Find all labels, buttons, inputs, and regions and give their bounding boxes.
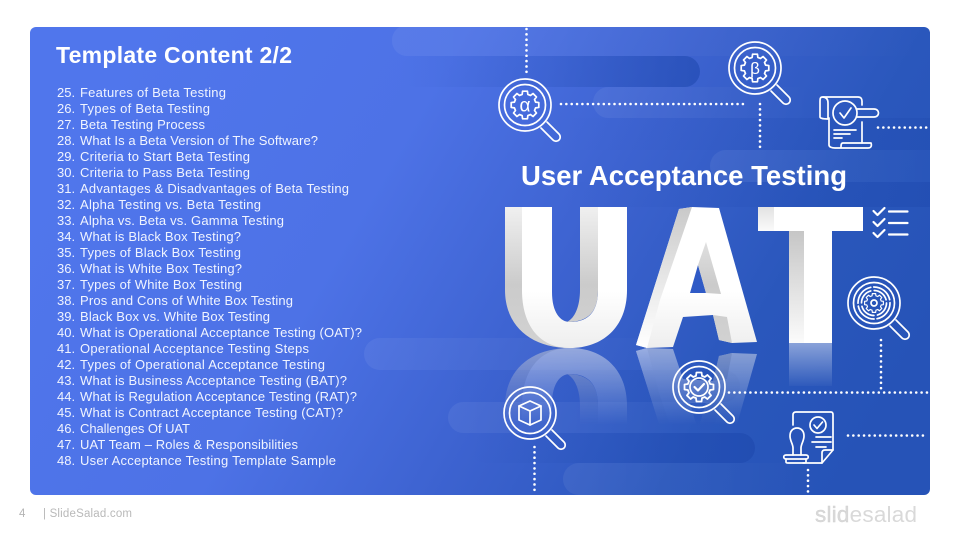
text block: table of contents list: 47.: [57, 437, 75, 452]
text block: table of contents list: 37.: [57, 277, 75, 292]
text block: table of contents list: 30.: [57, 165, 75, 180]
icon: alpha magnifier: [499, 79, 560, 141]
text block: table of contents list: What is Black Box Testing?: [80, 229, 241, 244]
3D letter U: [505, 207, 627, 348]
text block: table of contents list: 43.: [57, 373, 75, 388]
text block: table of contents list: 28.: [57, 133, 75, 148]
text block: table of contents list: What is Operational Acceptance Testing (OAT)?: [80, 325, 362, 340]
3D letter T: [758, 207, 863, 343]
text block: table of contents list: What is Contract Acceptance Testing (CAT)?: [80, 405, 343, 420]
text block: table of contents list: Types of Beta Testing: [80, 101, 210, 116]
icon: beta magnifier: [729, 42, 790, 104]
text block: table of contents list: UAT Team – Roles & Responsibilities: [80, 437, 298, 452]
text block: table of contents list: 46.: [57, 421, 75, 436]
text block: table of contents list: Types of White Box Testing: [80, 277, 242, 292]
text block: table of contents list: Criteria to Start Beta Testing: [80, 149, 250, 164]
icon: gear target magnifier: [848, 277, 909, 339]
logo: slidesalad: slidesalad: [815, 502, 917, 527]
text block: table of contents list: Beta Testing Process: [80, 117, 206, 132]
reflection of UAT letters: [505, 343, 832, 418]
text block: table of contents list: What Is a Beta Version of The Software?: [80, 133, 318, 148]
text block: table of contents list: 34.: [57, 229, 75, 244]
text block: table of contents list: 39.: [57, 309, 75, 324]
icon: stamp and certificate: [784, 412, 833, 463]
text block: table of contents list: 38.: [57, 293, 75, 308]
text block: table of contents list: 40.: [57, 325, 75, 340]
text block: table of contents list: 44.: [57, 389, 75, 404]
3D letter A: [636, 207, 757, 348]
dotted connector lines: [526, 29, 928, 494]
text block: table of contents list: Alpha vs. Beta vs. Gamma Testing: [80, 213, 284, 228]
text block: table of contents list: What is White Box Testing?: [80, 261, 242, 276]
footer: page number: 4: [19, 508, 26, 520]
icon: checklist: [874, 208, 908, 237]
heading: User Acceptance Testing: User Acceptance Testing: [521, 160, 847, 191]
text block: table of contents list: Alpha Testing vs. Beta Testing: [80, 197, 261, 212]
text block: table of contents list: 31.: [57, 181, 75, 196]
icon: beta magnifier: β: [750, 59, 760, 78]
text block: table of contents list: Operational Acceptance Testing Steps: [80, 341, 310, 356]
text block: table of contents list: 48.: [57, 453, 75, 468]
text block: table of contents list: Pros and Cons of White Box Testing: [80, 293, 293, 308]
icon: alpha magnifier: α: [520, 96, 531, 116]
text block: table of contents list: 41.: [57, 341, 75, 356]
text block: table of contents list: 29.: [57, 149, 75, 164]
icon: document with magnifier: [820, 97, 878, 148]
text block: table of contents list: Types of Black Box Testing: [80, 245, 241, 260]
text block: table of contents list: Challenges Of UAT: [80, 421, 190, 436]
text block: table of contents list: Types of Operational Acceptance Testing: [80, 357, 325, 372]
text block: table of contents list: [57, 85, 362, 468]
text block: table of contents list: Features of Beta Testing: [80, 85, 226, 100]
text block: table of contents list: 32.: [57, 197, 75, 212]
text block: table of contents list: 45.: [57, 405, 75, 420]
icon: cube magnifier: [504, 387, 565, 449]
text block: table of contents list: 33.: [57, 213, 75, 228]
text block: table of contents list: What is Business Acceptance Testing (BAT)?: [80, 373, 347, 388]
text block: table of contents list: What is Regulation Acceptance Testing (RAT)?: [80, 389, 357, 404]
text block: table of contents list: User Acceptance Testing Template Sample: [80, 453, 336, 468]
text block: table of contents list: 36.: [57, 261, 75, 276]
text block: table of contents list: 42.: [57, 357, 75, 372]
text block: table of contents list: 25.: [57, 85, 75, 100]
text block: table of contents list: Criteria to Pass Beta Testing: [80, 165, 250, 180]
text block: table of contents list: Black Box vs. White Box Testing: [80, 309, 270, 324]
footer: website: | SlideSalad.com: [43, 508, 132, 520]
text block: table of contents list: Advantages & Disadvantages of Beta Testing: [80, 181, 349, 196]
text block: table of contents list: 27.: [57, 117, 75, 132]
icon: check gear magnifier: [673, 361, 734, 423]
text block: table of contents list: 26.: [57, 101, 75, 116]
heading: Template Content 2/2: Template Content 2/2: [56, 42, 292, 68]
text block: table of contents list: 35.: [57, 245, 75, 260]
